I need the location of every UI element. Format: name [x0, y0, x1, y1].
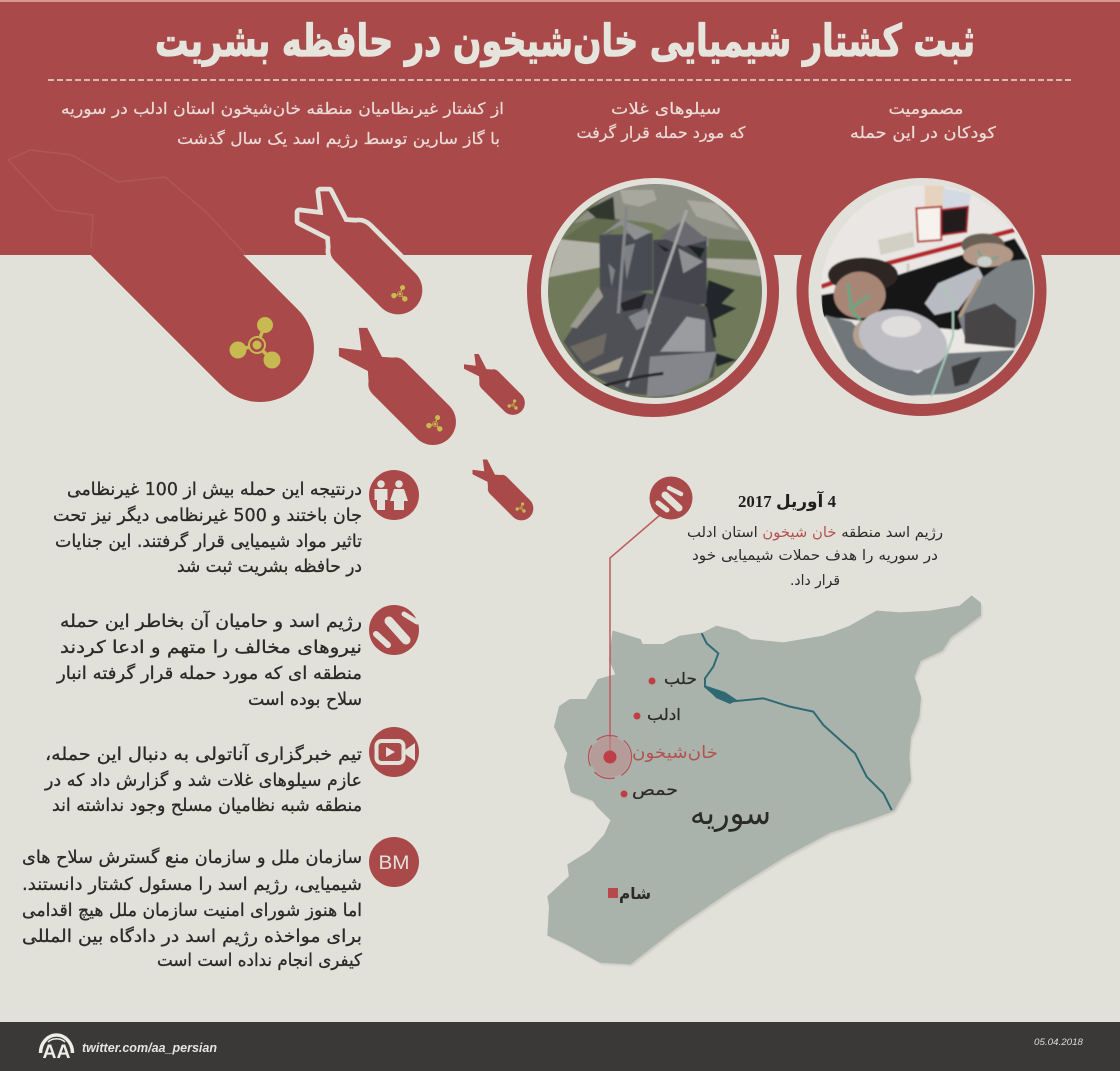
- header text: intro: [61, 99, 504, 149]
- text block 3: عازم سیلوهای غلات شد و گزارش داد که در: [44, 770, 362, 791]
- text block 4: کیفری انجام نداده است است: [157, 951, 363, 971]
- header text: silos: سیلوهای غلات: [611, 99, 721, 119]
- header band: [0, 0, 1120, 255]
- bomb 3: [461, 351, 530, 420]
- logo: Anadolu Agency: AA: [42, 1042, 71, 1063]
- photo: children with oxygen masks: [796, 166, 1046, 416]
- icon: people: [369, 470, 419, 520]
- text block 1: [53, 480, 362, 577]
- river Euphrates: [702, 633, 892, 810]
- text block 3: [44, 743, 362, 816]
- text block 3: منطقه شبه نظامیان مسلح وجود نداشته اند: [52, 796, 362, 816]
- text block 4: اما هنوز شورای امنیت سازمان ملل هیچ اقدامی: [22, 901, 362, 921]
- header text: intro: با گاز سارین توسط رژیم اسد یک سال گذشت: [177, 129, 500, 149]
- header text: children: مصمومیت: [888, 99, 964, 119]
- label: Homs: حمص: [632, 780, 678, 800]
- label: Homs: [620, 780, 678, 800]
- text block 2: [56, 610, 362, 710]
- header text: children: [850, 99, 996, 143]
- bomb 4: [469, 456, 538, 525]
- text block 4: برای مواخذه رژیم اسد در دادگاه بین المللی: [22, 926, 362, 947]
- icon: BM: BM: [378, 853, 410, 874]
- text block 1: درنتیجه این حمله بیش از 100 غیرنظامی: [67, 480, 362, 500]
- text block 1: تاثیر مواد شیمیایی قرار گرفتند. این جنایات: [55, 531, 362, 552]
- footer date: 05.04.2018: [1034, 1037, 1083, 1047]
- header text: children: کودکان در این حمله: [850, 123, 996, 143]
- callout text: در سوریه را هدف حملات شیمیایی خود: [692, 548, 938, 564]
- label: Damascus: شام: [619, 884, 651, 903]
- text block 1: جان باختند و 500 غیرنظامی دیگر نیز تحت: [53, 505, 362, 526]
- large bomb: [8, 150, 280, 368]
- text block 3: تیم خبرگزاری آناتولی به دنبال این حمله،: [45, 743, 362, 765]
- text block 1: در حافظه بشریت ثبت شد: [177, 557, 362, 577]
- callout text: قرار داد.: [790, 573, 840, 589]
- header text: silos: [576, 99, 746, 143]
- callout date: 4 آوریل 2017: [738, 490, 836, 512]
- callout pin icon: [650, 476, 692, 520]
- callout text: [687, 525, 943, 589]
- footer link: twitter.com/aa_persian: [82, 1040, 217, 1055]
- bomb 1 outlined: [293, 185, 432, 324]
- header text: intro: از کشتار غیرنظامیان منطقه خان‌شیخون استان ادلب در سوریه: [61, 99, 504, 119]
- label: Idlib: ادلب: [647, 705, 681, 724]
- label: Syria: سوریه: [690, 794, 771, 832]
- callout pin line: [610, 515, 660, 757]
- label: Idlib: [634, 705, 681, 724]
- text block 4: سازمان ملل و سازمان منع گسترش سلاح های: [22, 847, 362, 868]
- header text: silos: که مورد حمله قرار گرفت: [576, 123, 746, 143]
- callout text: رژیم اسد منطقه خان شیخون استان ادلب: [687, 525, 943, 541]
- text block 4: [22, 847, 363, 971]
- logo: Anadolu Agency: [40, 1035, 72, 1063]
- icon: BM: [369, 837, 419, 887]
- bomb 2: [333, 322, 465, 454]
- text block 2: منطقه ای که مورد حمله قرار گرفته انبار: [56, 663, 362, 684]
- footer bar: [0, 1022, 1120, 1071]
- text block 2: رژیم اسد و حامیان آن بخاطر این حمله: [60, 610, 362, 632]
- marker: Khan Sheikhoun: [588, 736, 632, 778]
- label: Aleppo: حلب: [664, 669, 697, 688]
- icon: bombs: [369, 605, 419, 655]
- photo: destroyed silos: [527, 165, 779, 417]
- map of Syria: [548, 597, 982, 966]
- icon: video camera: [369, 727, 419, 777]
- text block 2: نیروهای مخالف را متهم و ادعا کردند: [60, 638, 362, 658]
- label: Aleppo: [648, 669, 697, 688]
- text block 2: سلاح بوده است: [248, 690, 362, 710]
- label: Khan Sheikhoun: خان‌شیخون: [632, 743, 718, 763]
- text block 4: شیمیایی، رژیم اسد را مسئول کشتار دانستند.: [22, 875, 362, 895]
